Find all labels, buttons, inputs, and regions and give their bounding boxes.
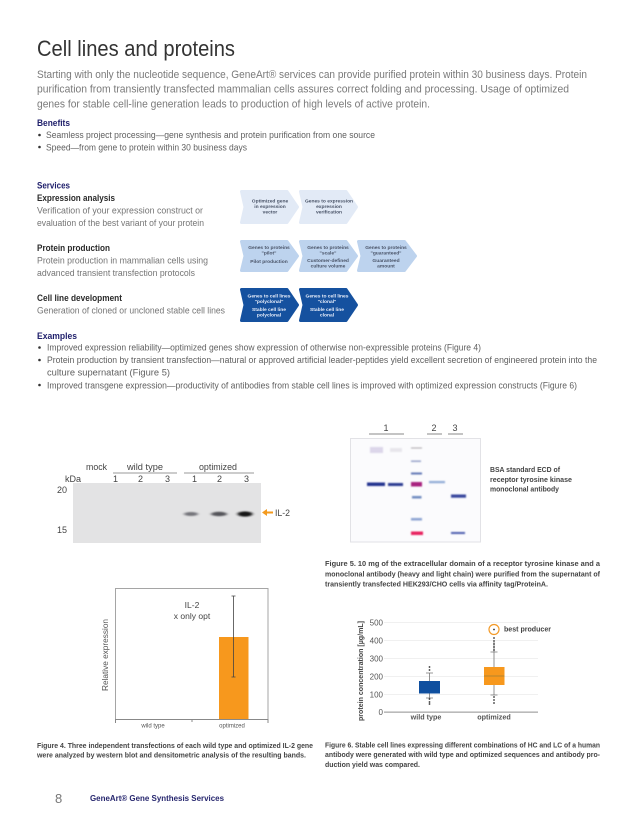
chevrons: cell line development: Genes to cell lines — [248, 294, 291, 300]
caption figure 5: transiently transfected HEK293/CHO cells via affinity tag/ProteinA. — [325, 580, 548, 588]
y tick labels: 300 — [370, 654, 384, 664]
chart annotation: IL-2 — [185, 600, 200, 610]
x axis labels: wild type — [140, 724, 165, 730]
chevrons: protein production: Guaranteed — [372, 258, 400, 264]
examples list: culture supernatant (Figure 5) — [47, 368, 170, 378]
y tick labels: 0 — [379, 708, 384, 717]
cell line development text: Generation of cloned or uncloned stable cell lines — [37, 306, 225, 316]
examples list: Improved transgene expression—productivity of antibodies from stable cell lines is improved with optimized expression constructs (Figure 6) — [47, 380, 577, 390]
error bar — [232, 596, 236, 677]
footer title: GeneArt® Gene Synthesis Services — [90, 793, 224, 803]
caption figure 6 — [325, 740, 601, 769]
gel figure 5 — [350, 423, 572, 542]
caption figure 4: were analyzed by western blot and densitometric analysis of the resulting bands. — [36, 750, 306, 760]
bar chart figure 4 — [100, 588, 268, 730]
blot labels: wild type — [126, 462, 163, 472]
chevrons: protein production: "pilot" — [262, 250, 276, 256]
chevrons: expression analysis: Optimized gene — [252, 198, 288, 204]
expression analysis text: Expression analysis — [37, 193, 115, 204]
expression analysis text — [37, 193, 204, 229]
x axis labels: optimized — [219, 724, 245, 730]
blot labels: optimized — [199, 462, 237, 472]
chevrons: cell line development: Stable cell line — [310, 307, 344, 313]
x axis — [115, 719, 268, 723]
lane labels: 3 — [452, 423, 458, 433]
x axis labels — [140, 724, 245, 730]
intro paragraph: purification from transiently transfected mammalian cells assures correct folding and processing. Usage of optimized — [37, 84, 569, 96]
chevrons: protein production: Genes to proteins — [248, 245, 290, 251]
y tick labels: 200 — [370, 672, 384, 682]
services heading: Services — [37, 180, 70, 192]
blot labels: mock — [86, 462, 107, 472]
blot labels: 3 — [244, 474, 249, 484]
gel legend: BSA standard ECD of — [490, 465, 561, 474]
y tick labels: 100 — [370, 690, 384, 700]
chevrons: protein production: "guaranteed" — [370, 250, 402, 256]
chevrons: cell line development: polyclonal — [257, 312, 282, 318]
examples list: Protein production by transient transfection—natural or approved artificial leader-peptides yield excellent secretion of engineered protein into the — [47, 355, 597, 365]
y axis title: protein concentration [µg/mL] — [356, 621, 365, 721]
chevrons: protein production: "scale" — [320, 250, 336, 256]
box plot category labels: optimized — [477, 712, 511, 722]
expression analysis text: evaluation of the best variant of your protein — [37, 218, 204, 229]
chevrons: cell line development: Genes to cell lines — [306, 294, 349, 300]
cell line development text — [37, 293, 225, 316]
benefits heading: Benefits — [37, 118, 70, 129]
lane labels — [369, 423, 463, 434]
expression analysis text: Verification of your expression construct or — [37, 206, 204, 216]
chevrons: expression analysis: in expression — [254, 204, 286, 210]
chevrons: cell line development: Stable cell line — [252, 307, 286, 313]
blot labels — [57, 462, 249, 535]
caption figure 6: duction yield was compared. — [325, 760, 420, 769]
western blot figure 4 — [57, 462, 290, 543]
chevrons: protein production: Genes to proteins — [307, 245, 349, 251]
examples list: Improved expression reliability—optimized genes show expression of otherwise non-expressible proteins (Figure 4) — [47, 342, 481, 352]
lane labels: 2 — [432, 423, 437, 433]
blot labels: kDa — [65, 474, 81, 484]
protein production text — [37, 243, 208, 279]
services section — [37, 180, 225, 316]
gel legend — [490, 465, 572, 494]
chevrons: expression analysis: expression — [316, 204, 342, 210]
chevrons: expression analysis: Genes to expression — [305, 198, 353, 204]
chevrons: cell line development: "clonal" — [318, 299, 336, 305]
blot labels: 2 — [217, 474, 222, 484]
blot labels: 1 — [192, 474, 197, 484]
caption figure 4: Figure 4. Three independent transfections of each wild type and optimized IL-2 gene — [37, 741, 313, 750]
optimized box — [484, 637, 504, 704]
IL-2 label: IL-2 — [275, 508, 290, 518]
IL-2 arrow — [262, 509, 273, 516]
gel image — [350, 438, 480, 542]
blot labels: 15 — [57, 525, 67, 535]
y tick labels: 500 — [370, 618, 384, 628]
optimized bar — [219, 637, 248, 719]
blot labels: 3 — [165, 474, 170, 484]
gel legend: monoclonal antibody — [490, 484, 559, 494]
chart annotation: x only opt — [174, 611, 211, 621]
blot labels: 20 — [57, 485, 67, 495]
axis baseline — [384, 712, 538, 713]
caption figure 5: monoclonal antibody (heavy and light chain) were purified from the supernatant of — [325, 570, 601, 578]
protein production text: Protein production in mammalian cells using — [37, 256, 208, 266]
benefits list — [38, 130, 375, 152]
examples section — [37, 331, 597, 390]
best producer label: best producer — [504, 624, 551, 634]
gel legend: receptor tyrosine kinase — [490, 475, 572, 484]
title: Cell lines and proteins — [37, 36, 235, 61]
caption figure 5: Figure 5. 10 mg of the extracellular domain of a receptor tyrosine kinase and a — [325, 559, 601, 568]
protein production text: advanced transient transfection protocols — [37, 268, 195, 279]
blot labels: 1 — [113, 474, 118, 484]
chevrons: expression analysis: vector — [263, 210, 277, 216]
plot frame — [116, 588, 268, 719]
lane labels: 1 — [384, 423, 389, 433]
chevrons: protein production: Pilot production — [250, 259, 288, 265]
protein production text: Protein production — [37, 243, 110, 254]
box plot category labels: wild type — [410, 712, 441, 722]
chevrons: protein production: Genes to proteins — [365, 245, 407, 251]
box plot category labels — [410, 712, 511, 722]
chevrons: protein production — [242, 242, 416, 270]
blot labels: 2 — [138, 474, 143, 484]
examples list — [38, 342, 597, 390]
caption figure 6: antibody were generated with wild type and optimized sequences and antibody pro- — [325, 750, 601, 759]
chart annotation — [174, 600, 211, 621]
y tick labels: 400 — [370, 636, 384, 646]
caption figure 4 — [36, 741, 313, 760]
examples heading: Examples — [37, 331, 77, 342]
benefits section — [37, 118, 375, 152]
wild type box — [419, 666, 440, 705]
chevrons: cell line development: clonal — [320, 312, 335, 318]
benefits list: Seamless project processing—gene synthesis and protein purification from one source — [46, 130, 375, 140]
benefits list: Speed—from gene to protein within 30 business days — [46, 142, 247, 152]
y axis title: Relative expression — [100, 619, 110, 691]
chevrons: cell line development: "polyclonal" — [255, 299, 283, 305]
chevrons: expression analysis: verification — [316, 210, 342, 216]
chevrons: cell line development — [242, 290, 356, 320]
intro paragraph — [37, 69, 587, 110]
chevrons: expression analysis — [242, 192, 356, 222]
box plot figure 6 — [356, 618, 551, 722]
page number: 8 — [55, 791, 62, 806]
intro paragraph: genes for stable cell-line generation leads to production of high levels of active protein. — [37, 98, 430, 110]
intro paragraph: Starting with only the nucleotide sequence, GeneArt® services can provide purified protein within 30 business days. Protein — [37, 69, 587, 81]
chevrons: protein production: Customer-defined — [307, 258, 349, 264]
caption figure 5 — [325, 559, 601, 588]
chevrons: protein production: culture volume — [311, 264, 346, 270]
blot membrane — [73, 483, 261, 543]
caption figure 6: Figure 6. Stable cell lines expressing different combinations of HC and LC of a human — [325, 740, 600, 750]
chevrons: protein production: amount — [377, 264, 395, 270]
best producer marker — [489, 624, 499, 634]
grid — [384, 622, 538, 694]
y tick labels — [370, 618, 384, 717]
cell line development text: Cell line development — [37, 293, 123, 304]
